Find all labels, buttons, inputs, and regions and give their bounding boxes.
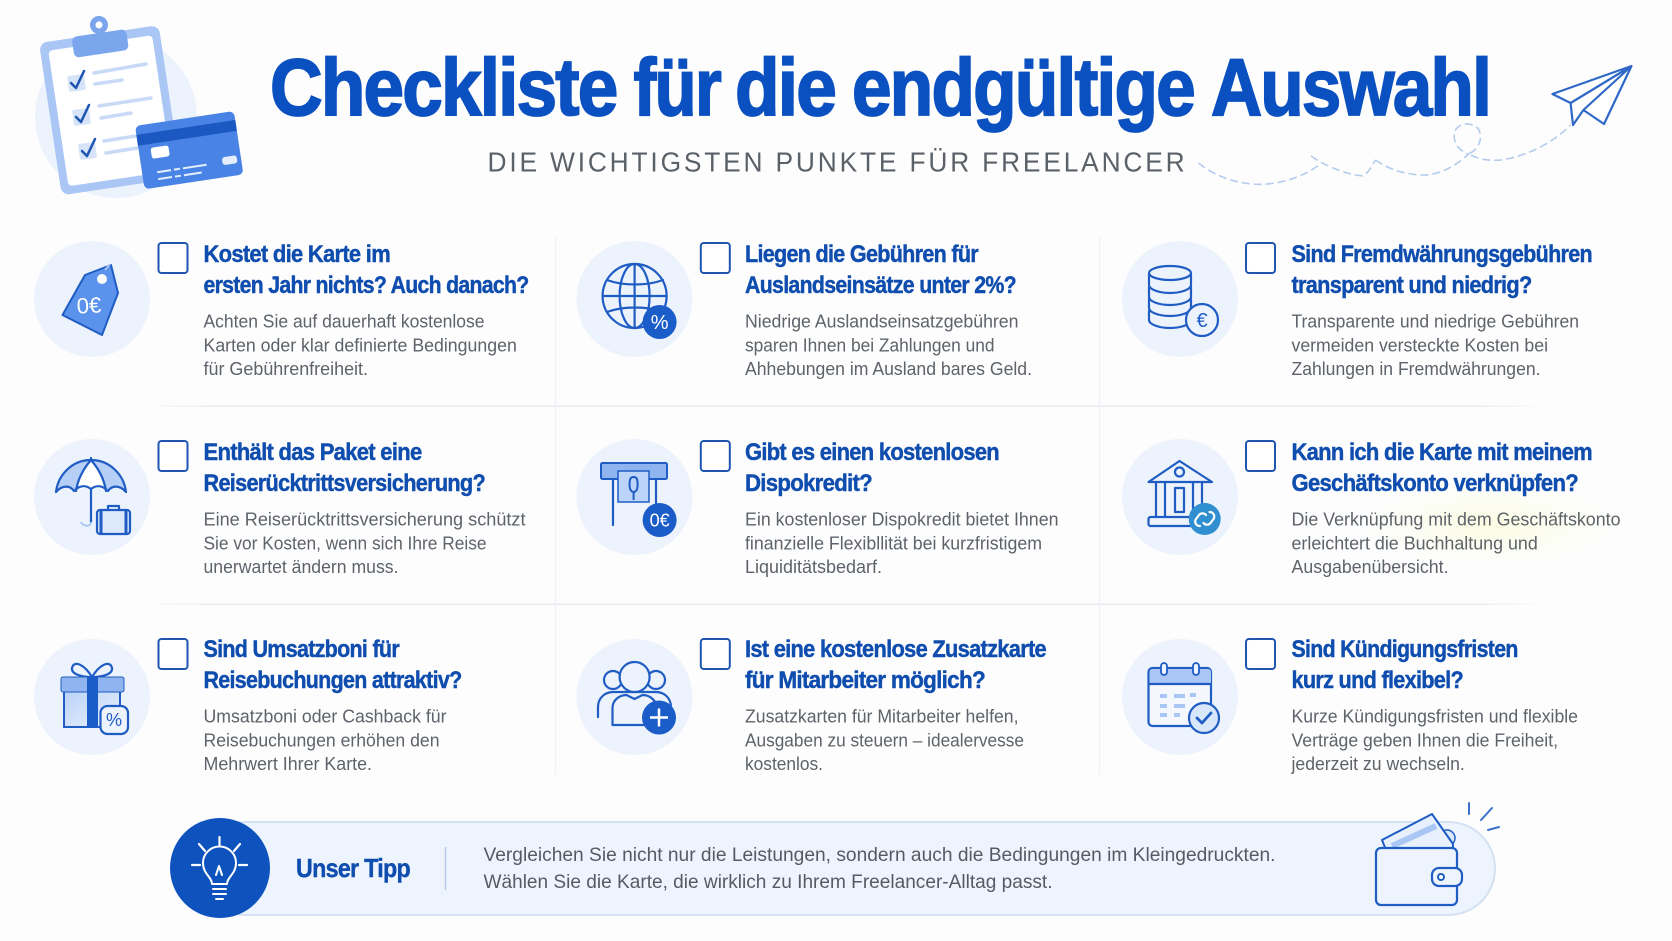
checklist item 3 [1122, 241, 1592, 379]
heading: Reiserücktrittsversicherung? [204, 470, 485, 497]
heading [204, 241, 528, 299]
heading: Sind Fremdwährungsgebühren [1292, 241, 1592, 268]
heading: Sind Kündigungsfristen [1292, 636, 1518, 663]
checkbox [1246, 441, 1275, 471]
description [204, 312, 517, 379]
icon: ATM with 0 euro [601, 463, 677, 537]
tip text [484, 844, 1276, 893]
description: Eine Reiserücktrittsversicherung schützt [204, 510, 526, 530]
heading [745, 636, 1046, 694]
description: Ein kostenloser Dispokredit bietet Ihnen [745, 510, 1058, 530]
description: Sie vor Kosten, wenn sich Ihre Reise [204, 534, 486, 554]
description: unerwartet ändern muss. [204, 557, 398, 577]
description: Ausgabenübersicht. [1292, 557, 1448, 577]
icon: gift with percent [61, 664, 128, 734]
heading [1292, 636, 1518, 694]
heading: Enthält das Paket eine [204, 439, 422, 466]
heading: Sind Umsatzboni für [204, 636, 400, 663]
heading: Dispokredit? [745, 470, 872, 497]
description: finanzielle Flexibllität bei kurzfristigem [745, 534, 1042, 554]
description: erleichtert die Buchhaltung und [1292, 534, 1538, 554]
checkbox [158, 441, 188, 471]
description [1292, 312, 1579, 379]
tip banner [170, 803, 1499, 918]
description: Reisebuchungen erhöhen den [204, 730, 440, 750]
description: kostenlos. [745, 754, 823, 774]
description: Mehrwert Ihrer Karte. [204, 754, 372, 774]
clipboard [36, 7, 181, 195]
checklist item 5 [576, 439, 1058, 577]
checklist item 9 [1122, 636, 1578, 774]
checkbox [1246, 243, 1275, 273]
description [745, 312, 1032, 379]
title: die [735, 43, 835, 133]
description [204, 706, 446, 774]
description: Zusatzkarten für Mitarbeiter helfen, [745, 706, 1018, 726]
checkbox [158, 243, 188, 273]
description: sparen Ihnen bei Zahlungen und [745, 336, 994, 356]
title: Auswahl [1211, 43, 1490, 133]
description [1291, 706, 1578, 774]
heading: transparent und niedrig? [1292, 272, 1532, 299]
heading [745, 439, 999, 497]
description [1292, 510, 1620, 577]
checklist item 6 [1122, 439, 1620, 577]
checklist item 2 [576, 241, 1032, 379]
icon: paper plane with dashed trail [1198, 66, 1632, 184]
heading: Unser Tipp: Unser Tipp [296, 853, 410, 883]
heading [204, 636, 462, 694]
heading: Liegen die Gebühren für [745, 241, 979, 268]
title: endgültige [852, 43, 1194, 133]
checklist item 1 [34, 241, 528, 379]
description: Ahhebungen im Ausland bares Geld. [745, 359, 1032, 379]
icon: umbrella and suitcase [56, 458, 130, 534]
tip text: Vergleichen Sie nicht nur die Leistungen, sondern auch die Bedingungen im Kleingedruckten. [484, 844, 1276, 866]
icon: light bulb [170, 818, 270, 918]
description: für Gebührenfreiheit. [204, 359, 368, 379]
checkbox [701, 441, 730, 471]
icon: calendar with check [1148, 663, 1219, 733]
tip text: Wählen Sie die Karte, die wirklich zu Ihrem Freelancer-Alltag passt. [484, 871, 1052, 893]
credit card [135, 111, 243, 189]
icon: ATM with 0 euro: 0€ [650, 510, 670, 530]
description: Liquiditätsbedarf. [745, 557, 882, 577]
title: Checkliste [270, 43, 616, 133]
heading: kurz und flexibel? [1292, 667, 1463, 694]
subtitle: DIE WICHTIGSTEN PUNKTE FÜR FREELANCER [488, 146, 1188, 178]
description: Achten Sie auf dauerhaft kostenlose [204, 312, 484, 332]
heading: ersten Jahr nichts? Auch danach? [204, 272, 528, 299]
description: Ausgaben zu steuern – idealervesse [745, 730, 1024, 750]
heading [204, 439, 485, 497]
description [204, 510, 526, 577]
icon: coin stack with euro [1149, 266, 1218, 336]
heading: Gibt es einen kostenlosen [745, 439, 999, 466]
icon: price tag 0 euro [62, 264, 118, 335]
checklist item 7 [34, 636, 462, 774]
checkbox [158, 639, 188, 669]
heading [745, 241, 1016, 299]
description: Kurze Kündigungsfristen und flexible [1292, 706, 1578, 726]
description: Niedrige Auslandseinsatzgebühren [745, 312, 1018, 332]
description [745, 510, 1058, 577]
description: Verträge geben Ihnen die Freiheit, [1292, 730, 1558, 750]
description: Die Verknüpfung mit dem Geschäftskonto [1292, 510, 1620, 530]
icon: coin stack with euro: € [1196, 310, 1208, 332]
description: Transparente und niedrige Gebühren [1292, 312, 1579, 332]
title: für [634, 43, 721, 133]
checkbox [1246, 639, 1275, 669]
heading [1292, 241, 1592, 299]
heading: für Mitarbeiter möglich? [745, 667, 985, 694]
heading: Reisebuchungen attraktiv? [204, 667, 462, 694]
icon: globe with percent [603, 264, 677, 339]
heading: Kann ich die Karte mit meinem [1292, 439, 1592, 466]
description: jederzeit zu wechseln. [1291, 754, 1465, 774]
icon: wallet [1376, 803, 1499, 905]
icon: team with plus [598, 662, 676, 734]
icon: bank with link [1148, 461, 1221, 535]
description: vermeiden versteckte Kosten bei [1292, 336, 1548, 356]
icon: price tag 0 euro: 0€ [76, 292, 102, 319]
icon: globe with percent: % [651, 312, 669, 334]
heading [1292, 439, 1592, 497]
checkbox [701, 639, 730, 669]
checkbox [701, 243, 730, 273]
heading: Geschäftskonto verknüpfen? [1292, 470, 1578, 497]
heading: Kostet die Karte im [204, 241, 390, 268]
checklist item 4 [34, 439, 526, 577]
heading: Ist eine kostenlose Zusatzkarte [745, 636, 1046, 663]
description [745, 706, 1024, 774]
description: Zahlungen in Fremdwährungen. [1292, 359, 1540, 379]
description: Umsatzboni oder Cashback für [204, 706, 446, 726]
checklist item 8 [576, 636, 1046, 774]
heading: Auslandseinsätze unter 2%? [745, 272, 1016, 299]
icon: gift with percent: % [106, 710, 122, 730]
illustration: clipboard and credit card [35, 7, 243, 198]
description: Karten oder klar definierte Bedingungen [204, 336, 517, 356]
title [270, 43, 1490, 133]
